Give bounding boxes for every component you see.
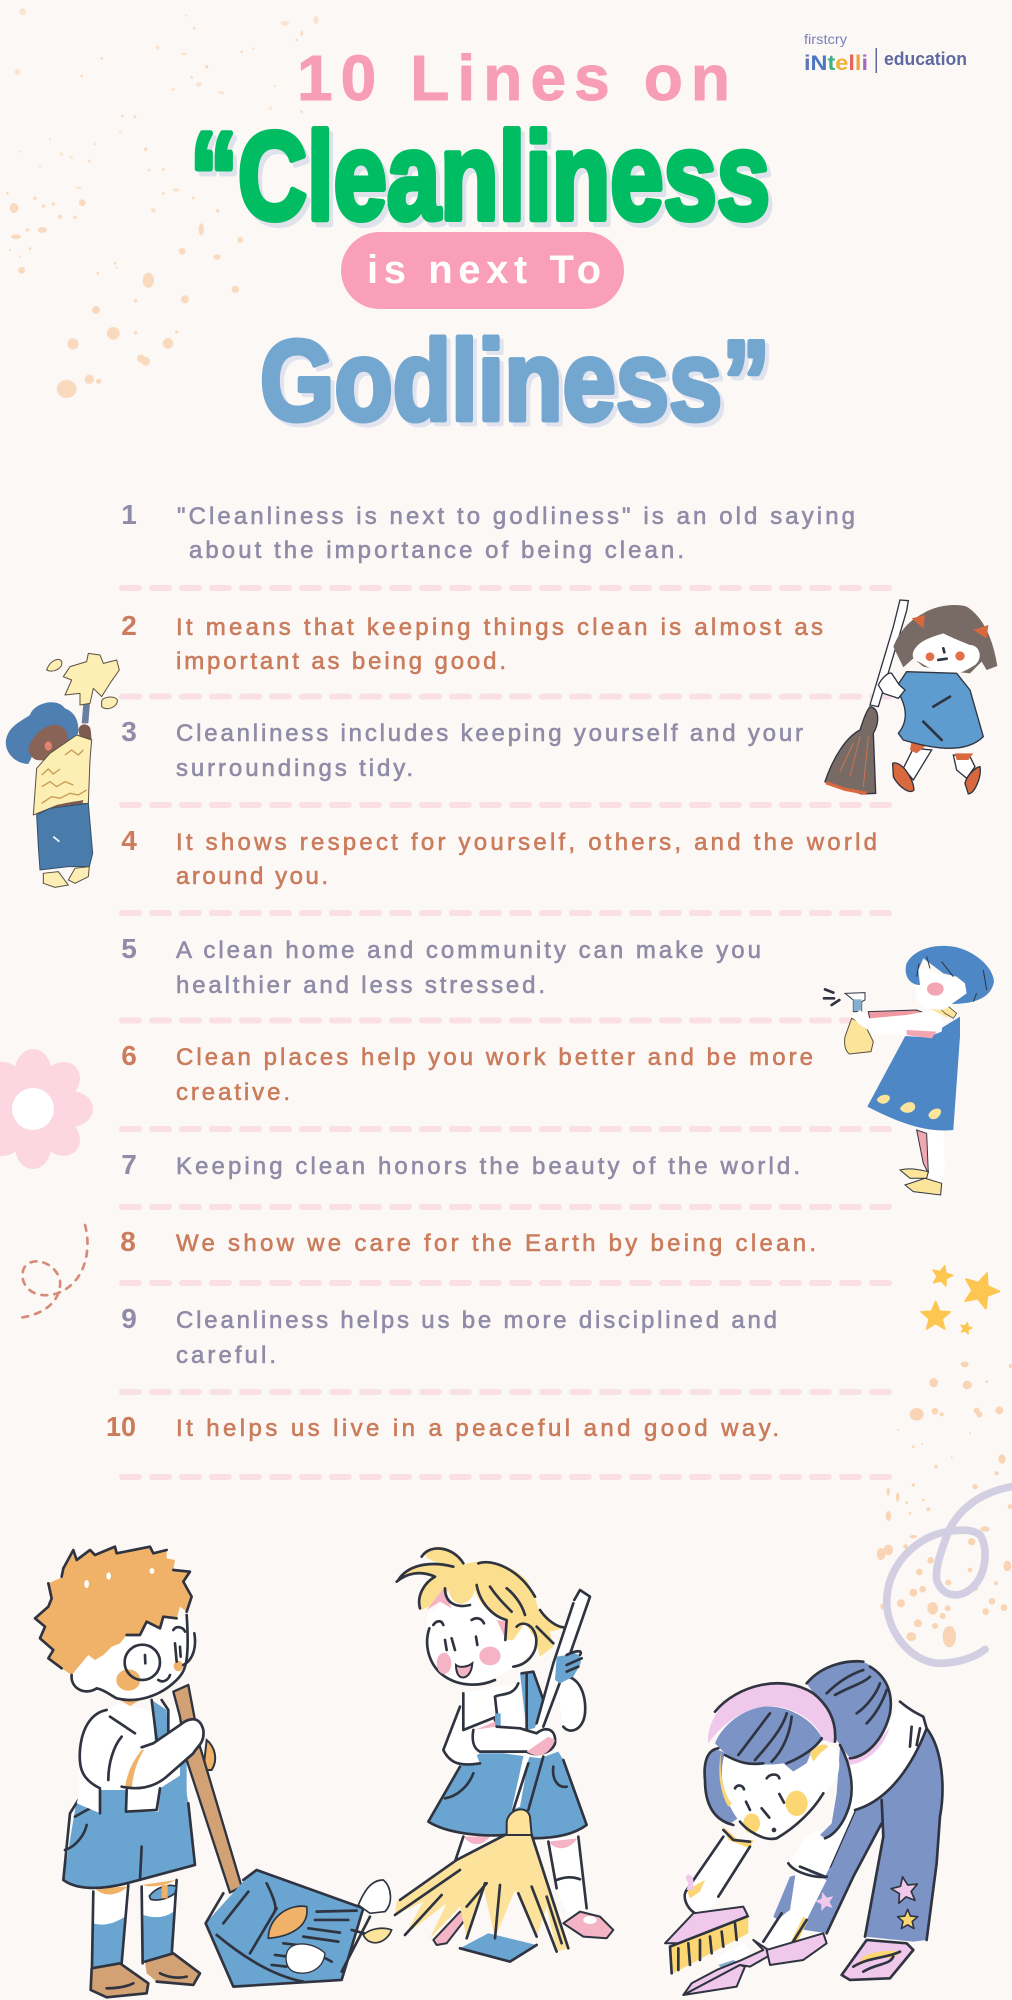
item 2: important as being good. (176, 648, 506, 675)
badge: is next To: is next To (367, 248, 601, 292)
item 5 (121, 933, 761, 999)
logo: firstcry intelli education: iNtelli (804, 52, 868, 75)
item 4: It shows respect for yourself, others, and the world (176, 829, 877, 856)
decoration: lilac swirl (887, 1487, 1012, 1663)
illustration: boy with dustpan (35, 1547, 392, 1997)
item 6: creative. (176, 1079, 290, 1106)
item 10: It helps us live in a peaceful and good way. (176, 1415, 779, 1442)
logo: firstcry intelli education: education (884, 49, 967, 69)
item 3: Cleanliness includes keeping yourself and your (176, 720, 803, 747)
item 9: 9 (121, 1303, 137, 1334)
item 1 (121, 499, 855, 564)
hair: boy spiky orange (35, 1547, 192, 1675)
item 6: Clean places help you work better and be more (176, 1044, 813, 1071)
item 8: 8 (120, 1226, 136, 1257)
leg: boy legs (91, 1880, 200, 1997)
item 2: 2 (121, 610, 137, 641)
item 9: careful. (176, 1342, 276, 1369)
item 4 (121, 825, 877, 890)
item 2 (121, 610, 823, 675)
item 10: 10 (106, 1411, 136, 1442)
badge: is next To (341, 232, 624, 309)
item 5: A clean home and community can make you (176, 937, 761, 964)
illustration: girl with brown broom (825, 600, 997, 794)
broom head (395, 1809, 568, 1952)
item 4: 4 (121, 825, 137, 856)
illustration: girl with spray bottle (824, 946, 994, 1195)
decoration: dashed loop (18, 1225, 87, 1318)
item 5: 5 (121, 933, 137, 964)
logo: firstcry intelli education: firstcry (804, 31, 847, 47)
item 2: It means that keeping things clean is almost as (176, 614, 823, 641)
item 3 (121, 716, 803, 782)
item 7: 7 (121, 1149, 137, 1180)
title: 10 Lines on: 10 Lines on (297, 42, 730, 114)
item 5: healthier and less stressed. (176, 972, 545, 999)
item 6: 6 (121, 1040, 137, 1071)
item 1: 1 (121, 499, 137, 530)
item 4: around you. (176, 863, 328, 890)
illustration: girl with brush and dustpan (665, 1661, 942, 1995)
logo: firstcry intelli education (804, 31, 967, 75)
list: ten lines (106, 499, 877, 1442)
item 1: "Cleanliness is next to godliness" is an old saying (177, 503, 855, 530)
icon: yellow stars (921, 1263, 1004, 1335)
item 1: about the importance of being clean. (189, 537, 684, 564)
item 8: We show we care for the Earth by being clean. (176, 1230, 816, 1257)
item 9: Cleanliness helps us be more disciplined and (176, 1307, 777, 1334)
title: Cleanliness: “Cleanliness (190, 108, 770, 246)
decoration: bottom-right speckles (877, 1361, 1012, 1647)
item 3: surroundings tidy. (176, 755, 413, 782)
title: Godliness: Godliness” (260, 318, 770, 445)
item 7: Keeping clean honors the beauty of the world. (176, 1153, 800, 1180)
item 9 (121, 1303, 777, 1369)
illustration: child with feather duster (6, 653, 119, 887)
decoration: top-left paint speckles (6, 8, 318, 398)
dustpan (206, 1870, 392, 1987)
icon: pink flower (0, 1049, 93, 1169)
item 6 (121, 1040, 813, 1106)
item 3: 3 (121, 716, 137, 747)
illustration: blonde girl sweeping (395, 1547, 613, 1962)
